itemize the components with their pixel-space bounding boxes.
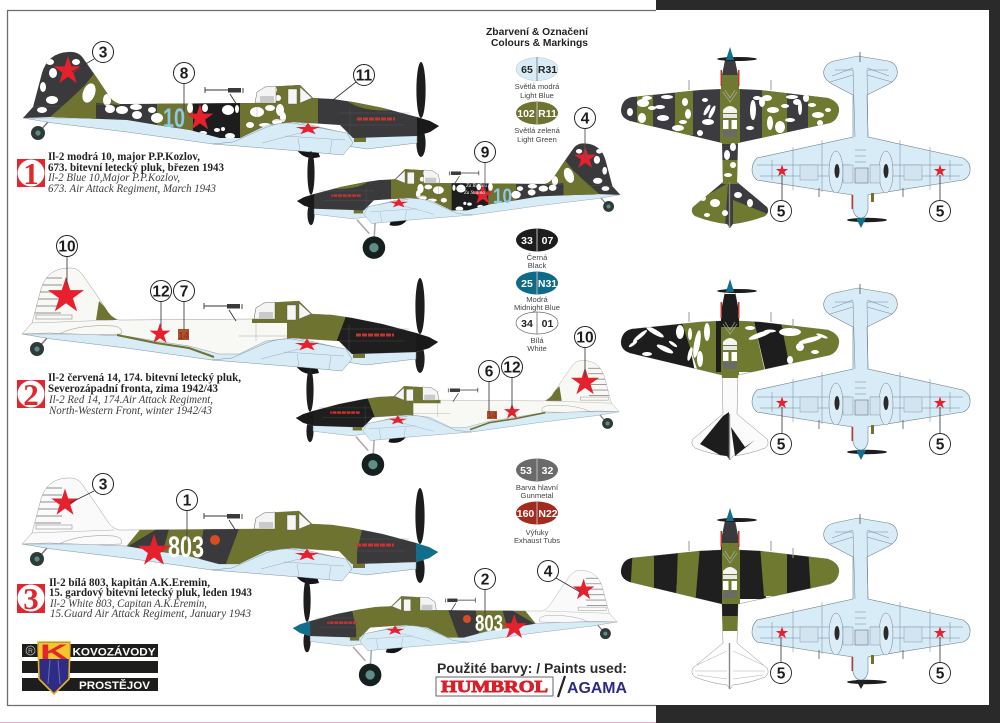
- callouts 5 row 3: [770, 637, 950, 684]
- callouts 5 row 2: 5: [936, 436, 945, 454]
- paint swatch: 53 32 Gunmetal: 53: [520, 465, 532, 477]
- caption 3: [49, 575, 252, 620]
- paint swatch: 102 R11 Light Green: R11: [538, 108, 557, 120]
- badge 2: 2: [23, 377, 39, 412]
- callouts 5 row 3: 5: [777, 666, 786, 682]
- caption 1: 673. Air Attack Regiment, March 1943: [48, 181, 216, 195]
- caption 1: 673. bitevní letecký pluk, březen 1943: [48, 160, 224, 174]
- callout 4 plane 3: [538, 560, 580, 592]
- plane 1 side view, left profile: [23, 52, 439, 158]
- legend title: [486, 27, 589, 49]
- plane 3 bottom view: [752, 514, 970, 689]
- callout 9: 9: [481, 144, 490, 162]
- paint swatch: 34 01 White: [516, 312, 558, 353]
- callouts 5 row 1: [770, 175, 950, 222]
- pink bottom line: [0, 722, 656, 723]
- paint swatch: 33 07 Black: 33: [521, 235, 533, 247]
- plane 3 top view: [615, 508, 845, 689]
- plane 2 side view, right profile: 14: [488, 411, 497, 420]
- logo: Kovozávody Prostějov: PROSTĚJOV: [79, 679, 151, 692]
- callout 7: 7: [180, 284, 188, 300]
- caption 2: Severozápadní fronta, zima 1942/43: [48, 381, 218, 395]
- paint swatch: 160 N22 Exhaust Tubs: 160: [517, 508, 534, 520]
- plane 1 side view, right profile: 10: [493, 185, 512, 208]
- callout 3 plane 3: [70, 474, 114, 503]
- paint swatch: 33 07 Black: [516, 228, 558, 270]
- callout 12 plane 2: 12: [152, 284, 170, 300]
- badge 3: 3: [23, 581, 39, 616]
- paint swatch: 65 R31 Light Blue: [515, 57, 560, 100]
- paint swatch: 102 R11 Light Green: Light Green: [517, 135, 557, 144]
- callouts 5 row 1: 5: [936, 204, 945, 220]
- callout 3 plane 1: [72, 42, 114, 72]
- callout 10 plane 2 right: 10: [576, 330, 594, 346]
- Humbrol logo: HUMBROL: [441, 677, 548, 696]
- paint swatch: 102 R11 Light Green: [514, 101, 561, 144]
- plane 3 side view, right profile: 803: [475, 610, 503, 636]
- paint swatch: 160 N22 Exhaust Tubs: [514, 501, 560, 545]
- plane 1 side view, right profile: [297, 143, 620, 259]
- paint swatch: 102 R11 Light Green: 102: [517, 108, 535, 120]
- callouts 5 row 2: 5: [777, 436, 786, 454]
- plane 1 side view, left profile: 10: [163, 103, 185, 133]
- callout 6: 6: [485, 364, 494, 380]
- paint swatch: 34 01 White: 34: [521, 318, 533, 330]
- paint swatch: 160 N22 Exhaust Tubs: N22: [538, 508, 558, 520]
- paint swatch: 25 N31 Midnight Blue: N31: [538, 278, 557, 290]
- paint swatch: 160 N22 Exhaust Tubs: Exhaust Tubs: [514, 536, 560, 545]
- caption 1: Il-2 modrá 10, major P.P.Kozlov,: [48, 149, 200, 163]
- callout 12 plane 2 right: 12: [503, 360, 521, 376]
- paint swatch: 65 R31 Light Blue: Light Blue: [520, 91, 554, 100]
- caption 1: [47, 149, 224, 195]
- logo: Kovozávody Prostějov: K: [40, 641, 68, 664]
- caption 3: 15.Guard Air Attack Regiment, January 1943: [50, 606, 251, 620]
- paint swatch: 33 07 Black: Black: [528, 261, 546, 270]
- callout 12 plane 2: [150, 280, 172, 327]
- plane 1 bottom view: [752, 52, 970, 228]
- paint swatch: 33 07 Black: 07: [542, 235, 553, 247]
- legend title: Colours & Markings: [491, 38, 589, 49]
- badge 1: [17, 156, 45, 191]
- badge 1: 1: [23, 156, 39, 191]
- callout 4 plane 1: [574, 108, 596, 158]
- paint swatch: 65 R31 Light Blue: R31: [538, 64, 557, 76]
- caption 3: 15. gardový bitevní letecký pluk, leden 1943: [49, 585, 252, 599]
- callout 6: [478, 360, 500, 412]
- plane 3 side view, left profile: [22, 478, 444, 584]
- page frame: [8, 10, 656, 706]
- logo: Kovozávody Prostějov: [22, 641, 158, 694]
- badge 3: [17, 581, 45, 616]
- paints used heading: Použité barvy: / Paints used:: [437, 661, 627, 676]
- paint swatch: 65 R31 Light Blue: 65: [521, 64, 533, 76]
- paint swatch: 65 R31 Light Blue: Světlá modrá: [515, 82, 560, 91]
- callout 4 plane 3: 4: [544, 564, 553, 580]
- callout 9: [474, 142, 496, 196]
- caption 2: Il-2 Red 14, 174.Air Attack Regiment,: [48, 392, 213, 406]
- callout 11: 11: [356, 68, 373, 84]
- callout 10 plane 2: 10: [58, 238, 76, 256]
- legend title: Zbarvení & Označení: [486, 27, 588, 38]
- paint swatch: 53 32 Gunmetal: 32: [542, 465, 553, 477]
- plane 1 side view, right profile: Za Stalina: [464, 191, 485, 196]
- plane 2 bottom view: [752, 284, 970, 460]
- logo: Kovozávody Prostějov: KOVOZÁVODY: [72, 646, 156, 658]
- callout 8: [174, 62, 194, 112]
- caption 1: Il-2 Blue 10,Major P.P.Kozlov,: [47, 170, 180, 184]
- dark corner band: [656, 0, 1000, 723]
- callout 4 plane 1: 4: [581, 110, 590, 128]
- paint swatch: 25 N31 Midnight Blue: [514, 271, 560, 312]
- plane 1 top view: [621, 47, 845, 228]
- paint swatch: 33 07 Black: Černá: [527, 253, 548, 262]
- badge 2: [17, 377, 45, 412]
- logo: Kovozávody Prostějov: R: [28, 648, 33, 655]
- callout 1: [176, 490, 198, 540]
- callout 11: [333, 64, 374, 100]
- plane 3 side view, left profile: 803: [168, 531, 204, 564]
- Agama logo: AGAMA: [567, 680, 627, 697]
- paint swatch: 34 01 White: Bílá: [530, 336, 544, 345]
- callout 7: [174, 280, 194, 330]
- plane 2 side view, left profile: 14: [178, 331, 189, 342]
- caption 2: [48, 370, 241, 417]
- paint swatch: 25 N31 Midnight Blue: Modrá: [526, 295, 549, 304]
- paint swatch: 102 R11 Light Green: Světlá zelená: [514, 126, 561, 135]
- paint swatch: 160 N22 Exhaust Tubs: Výfuky: [526, 528, 549, 537]
- plane 2 side view, left profile: [22, 268, 444, 374]
- callout 2: 2: [481, 572, 489, 588]
- paint swatch: 34 01 White: 01: [542, 318, 553, 330]
- caption 3: Il-2 bílá 803, kapitán A.K.Eremin,: [49, 575, 210, 589]
- callout 12 plane 2 right: [502, 356, 522, 410]
- paint swatch: 53 32 Gunmetal: Barva hlavní: [516, 483, 559, 492]
- plane 2 top view: [615, 279, 845, 460]
- caption 3: Il-2 White 803, Capitan A.K.Eremin,: [49, 596, 207, 610]
- plane 1 side view, right profile: Za Rodinu: [466, 184, 487, 189]
- paint swatch: 53 32 Gunmetal: Gunmetal: [521, 491, 554, 500]
- callouts 5 row 1: 5: [777, 204, 786, 220]
- callout 3 plane 1: 3: [99, 44, 108, 62]
- caption 2: Il-2 červená 14, 174. bitevní letecký pluk,: [48, 370, 241, 384]
- callout 10 plane 2 right: [574, 326, 596, 378]
- callouts 5 row 3: 5: [936, 666, 945, 682]
- paint swatch: 53 32 Gunmetal: [516, 458, 559, 500]
- callout 10 plane 2: [56, 236, 78, 285]
- callout 2: [474, 568, 496, 618]
- paint swatch: 25 N31 Midnight Blue: Midnight Blue: [514, 303, 560, 312]
- plane 3 side view, right profile: [288, 570, 617, 686]
- callouts 5 row 2: [770, 407, 950, 454]
- paint swatch: 34 01 White: White: [527, 344, 547, 353]
- paint swatch: 25 N31 Midnight Blue: 25: [521, 278, 533, 290]
- callout 1: 1: [183, 492, 192, 510]
- callout 8: 8: [180, 66, 189, 82]
- callout 3 plane 3: 3: [99, 476, 108, 494]
- slash divider: [558, 676, 565, 697]
- plane 2 side view, right profile: [291, 360, 619, 476]
- caption 2: North-Western Front, winter 1942/43: [48, 403, 212, 417]
